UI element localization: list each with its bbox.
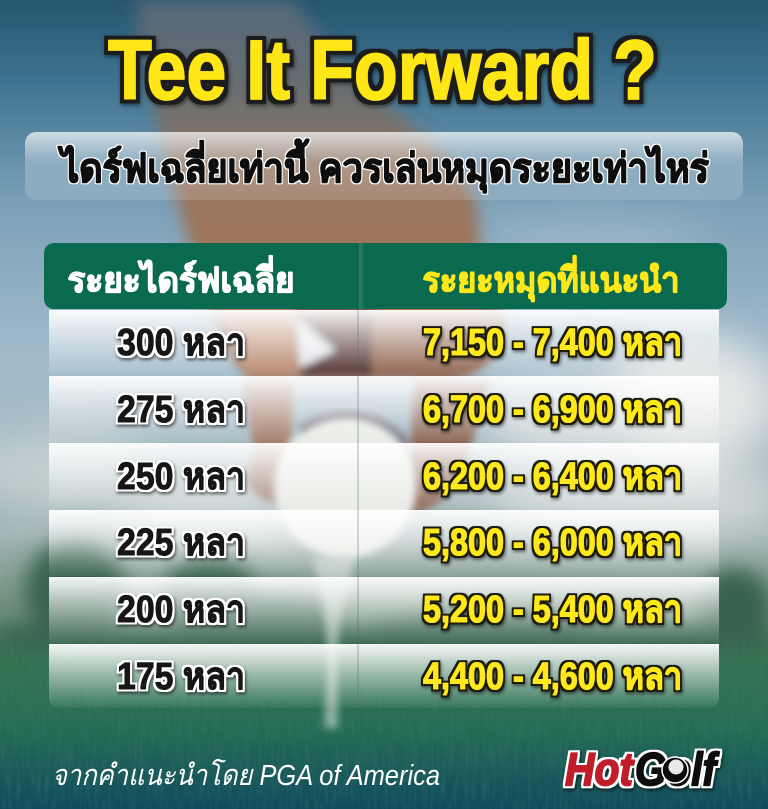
table header [44, 243, 727, 309]
row 275 yards [117, 389, 682, 431]
row 225 yards: 225 หลา [117, 522, 245, 564]
row 225 yards: 5,800 - 6,000 หลา [423, 522, 682, 564]
row 250 yards: 250 หลา [117, 456, 245, 498]
logo: HotGolf [565, 743, 720, 795]
row 275 yards: 6,700 - 6,900 หลา [423, 389, 682, 431]
clouds [0, 218, 768, 544]
row 175 yards [117, 656, 682, 698]
logo: HotGolf: Hot [565, 743, 634, 795]
arm [137, 0, 502, 320]
row 275 yards: 275 หลา [117, 389, 245, 431]
row 250 yards: 6,200 - 6,400 หลา [423, 456, 682, 498]
source note: จากคำแนะนำโดย PGA of America [52, 758, 440, 792]
grass [0, 640, 768, 809]
trees [0, 540, 768, 650]
row 175 yards: 4,400 - 4,600 หลา [423, 656, 682, 698]
row 200 yards: 200 หลา [117, 589, 245, 631]
row 300 yards [117, 322, 682, 364]
subtitle panel [25, 132, 743, 200]
row 225 yards [117, 522, 682, 564]
tee [312, 556, 356, 728]
row 300 yards: 7,150 - 7,400 หลา [423, 322, 682, 364]
row 175 yards: 175 หลา [117, 656, 245, 698]
icon: golf ball in logo [662, 757, 688, 783]
logo: HotGolf: Golf [635, 743, 720, 795]
header: recommended tee distance: ระยะหมุดที่แนะนำ [422, 255, 680, 302]
row 300 yards: 300 หลา [117, 322, 245, 364]
row 250 yards [117, 456, 682, 498]
title: Tee It Forward ? [108, 23, 657, 117]
row 200 yards: 5,200 - 5,400 หลา [423, 589, 682, 631]
golf ball [274, 416, 416, 558]
subtitle: ไดร์ฟเฉลี่ยเท่านี้ ควรเล่นหมุดระยะเท่าไหร่ [57, 139, 709, 194]
row 200 yards [117, 589, 682, 631]
fingers [218, 310, 504, 515]
table rows [49, 309, 719, 708]
header: average drive distance: ระยะไดร์ฟเฉลี่ย [68, 255, 294, 300]
